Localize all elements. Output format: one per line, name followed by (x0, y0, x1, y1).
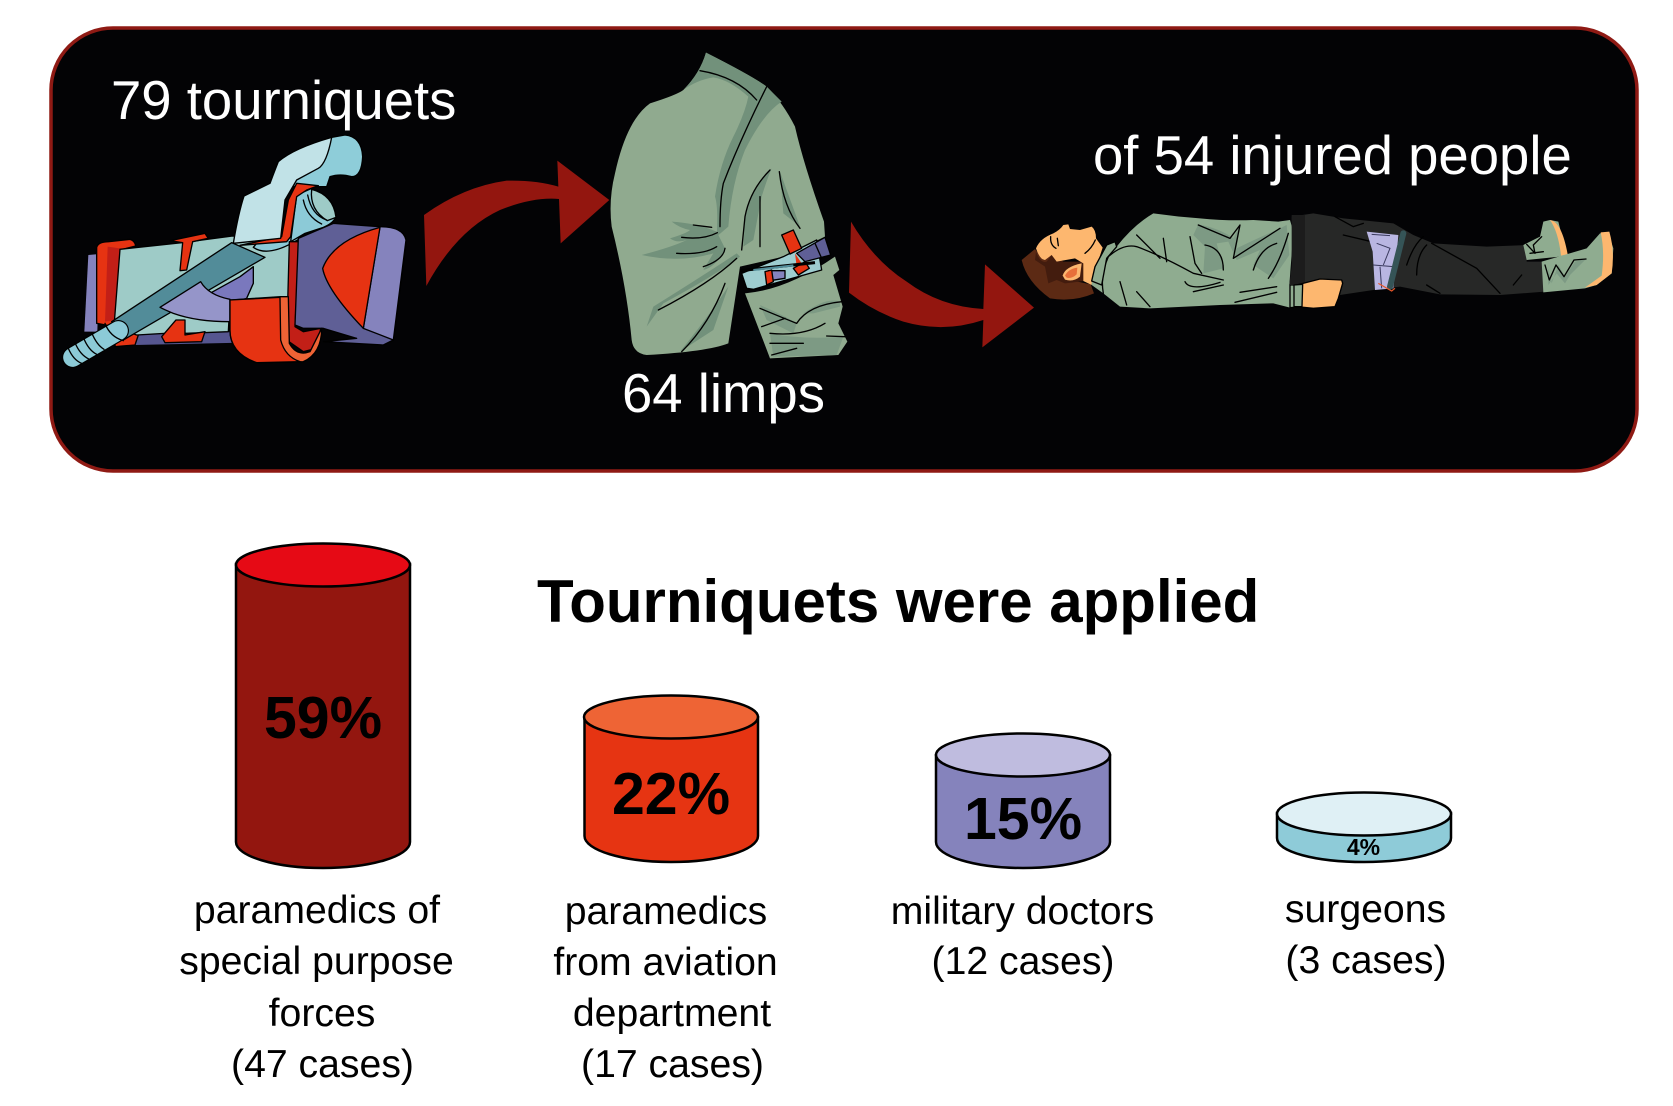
panel: tourniquet summary (51, 28, 1637, 471)
label: paramedics of special purpose forces: paramedics of (194, 889, 440, 932)
label: surgeons: surgeons (1285, 888, 1446, 931)
text: of 54 injured people: of 54 injured people (1093, 125, 1572, 186)
person legs and boots (1292, 213, 1613, 308)
person upper body (1022, 213, 1313, 308)
arrow: limb to person (849, 222, 1034, 347)
cylinder: 22%: 22% (612, 761, 730, 827)
panel background (51, 28, 1637, 471)
cylinder: 59%: 59% (264, 685, 382, 751)
label: paramedics of special purpose forces: (47 cases) (231, 1043, 414, 1086)
label: paramedics from aviation department: department (573, 992, 771, 1035)
label: paramedics of special purpose forces (179, 889, 454, 1086)
cylinder: 4%: 4% (1347, 834, 1380, 860)
icon: injured person lying down (1022, 213, 1613, 308)
label: paramedics of special purpose forces: special purpose (179, 940, 454, 983)
label: paramedics from aviation department (553, 890, 778, 1086)
label: military doctors: military doctors (891, 890, 1154, 933)
heading: Tourniquets were applied (537, 568, 1259, 635)
text: 64 limps: 64 limps (622, 363, 825, 424)
label: paramedics from aviation department: (17 cases) (581, 1043, 764, 1086)
text: 79 tourniquets: 79 tourniquets (111, 70, 456, 131)
label: military doctors (891, 890, 1154, 983)
cylinder: 15% (936, 734, 1110, 868)
cylinder: 22% (584, 696, 758, 862)
cylinder: 59% (236, 544, 410, 868)
label: surgeons (1285, 888, 1447, 982)
label: surgeons: (3 cases) (1285, 939, 1447, 982)
cylinder: 15%: 15% (964, 786, 1082, 852)
label: paramedics from aviation department: from aviation (553, 941, 778, 984)
label: military doctors: (12 cases) (932, 940, 1114, 983)
label: paramedics from aviation department: paramedics (565, 890, 767, 933)
cylinder: 4% (1277, 792, 1451, 862)
label: paramedics of special purpose forces: forces (269, 992, 375, 1035)
chart: who applied tourniquets (236, 544, 1451, 868)
icon: arm with tourniquet (611, 53, 847, 358)
icon: tourniquet (68, 135, 406, 363)
arrow: tourniquet to limb (424, 161, 609, 286)
